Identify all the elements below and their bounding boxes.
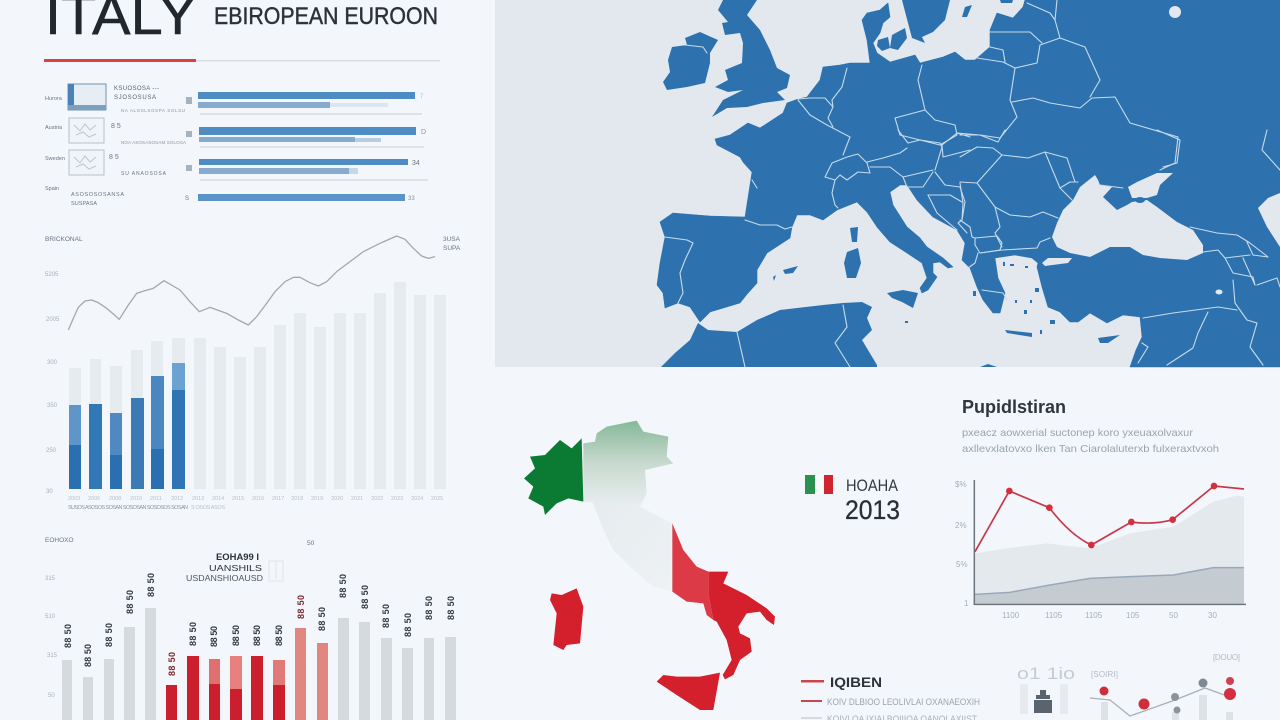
y axis labels: 30 [46, 489, 53, 495]
row 1: icon, labels and bars: 7 [420, 94, 424, 100]
map: Europe [495, 0, 1280, 367]
x axis labels: SUSOS ASOSOS SOSAN SOSOSAN SOSOSOS SOSAN [68, 505, 188, 511]
chart: red and grey bars: 50 [307, 540, 315, 547]
value labels: 88 50 [381, 604, 391, 628]
row 4: labels and bars [45, 186, 415, 207]
light area [975, 496, 1244, 603]
Sweden and Baltic islands [877, 0, 1013, 51]
chart: stacked blue bars with line: BRICKONAL [45, 236, 83, 243]
Sardinia [550, 588, 583, 650]
axis labels: 1100 [1002, 611, 1020, 620]
Sicily [657, 673, 720, 710]
dark area [975, 568, 1244, 603]
y axis labels: 5205 [45, 272, 59, 278]
x axis labels: 2018 [291, 496, 303, 502]
x axis labels: 2006 [88, 496, 100, 502]
legend [801, 674, 980, 720]
value labels: 88 50 [188, 622, 198, 646]
value labels: 88 50 [209, 626, 219, 647]
x axis labels: S OSOS ASOS [191, 505, 225, 511]
value labels: 88 50 [424, 596, 434, 620]
axis labels: 5% [956, 560, 968, 569]
axis labels: 1105 [1085, 611, 1103, 620]
chart heading [186, 552, 283, 583]
x axis labels: 2010 [130, 496, 142, 502]
y axis labels [45, 272, 60, 495]
Black Sea, Azov, Caspian, Marmara and lakes [1042, 6, 1280, 294]
chart heading: UANSHILS [209, 563, 262, 573]
population heading and text [962, 397, 1219, 455]
y axis labels: 250 [46, 448, 57, 454]
value labels: 88 50 [146, 573, 156, 597]
value labels: 88 50 [231, 625, 241, 646]
chart: stacked blue bars with line [45, 236, 461, 511]
chart: stacked blue bars with line: SUPA [443, 245, 461, 252]
row 4: labels and bars: S [185, 196, 189, 202]
row 1: icon, labels and bars: SJOSOSUSA [114, 95, 156, 101]
axes [974, 480, 1246, 604]
legend: IQIBEN [830, 674, 882, 690]
population heading and text: axllevxlatovxo lken Tan Ciarolaluterxb fulxeraxtvxoh [962, 443, 1219, 455]
central region [592, 500, 672, 592]
row 1: icon, labels and bars: NA ALOSLSOSPA SOLSU [121, 108, 185, 113]
value labels: 88 50 [252, 625, 262, 646]
x axis labels: 2008 [109, 496, 121, 502]
x axis labels: 2015 [232, 496, 244, 502]
population heading and text: Pupidlstiran [962, 397, 1066, 417]
country borders [665, 0, 1280, 367]
x axis labels: 2020 [331, 496, 343, 502]
y axis labels: 350 [47, 403, 58, 409]
population heading and text: pxeacz aowxerial suctonep koro yxeuaxolvaxur [962, 427, 1194, 439]
icon and mini line chart [1017, 653, 1240, 720]
axis labels [955, 480, 1217, 620]
flag and year label: 2013 [845, 495, 900, 525]
y axis labels: 315 [45, 576, 56, 582]
row 2: icon, labels and bars: NOA ASOSASOSAM SOLOSA [121, 140, 186, 145]
value labels: 88 50 [296, 595, 306, 619]
flag and year label [805, 475, 900, 525]
value labels: 88 50 [317, 607, 327, 631]
chart heading: USDANSHIOAUSD [186, 574, 263, 583]
Mediterranean islands [773, 227, 1120, 367]
x axis labels: 2025 [431, 496, 443, 502]
icon: device [1034, 690, 1052, 713]
row 2: icon, labels and bars: Austria [45, 125, 63, 131]
chart: red and grey bars [45, 537, 456, 720]
y axis labels: 2005 [46, 317, 60, 323]
flag and year label: HOAHA [846, 476, 899, 495]
north east region [583, 421, 673, 507]
x axis labels [68, 496, 443, 511]
x axis labels: 2014 [212, 496, 224, 502]
value labels: 88 50 [403, 613, 413, 637]
axis labels: $% [955, 480, 967, 489]
value labels: 88 50 [338, 574, 348, 598]
value labels: 88 50 [125, 590, 135, 614]
value labels: 88 50 [274, 625, 284, 646]
icon and mini line chart: [SOIRI] [1091, 670, 1118, 679]
row 3: icon, labels and bars: 34 [412, 160, 420, 167]
x axis labels: 2003 [68, 496, 80, 502]
chart: stacked blue bars with line: 3USA [443, 236, 461, 243]
map: Italy in flag colours [524, 421, 775, 710]
x axis labels: 2017 [272, 496, 284, 502]
row 3: icon, labels and bars [45, 150, 428, 181]
row 1: icon, labels and bars [45, 84, 424, 115]
axis labels: 1 [964, 599, 969, 608]
y axis labels: 300 [47, 360, 58, 366]
x axis labels: 2022 [371, 496, 383, 502]
row 2: icon, labels and bars: D [421, 129, 426, 136]
southern red region [708, 572, 775, 679]
axis labels: 105 [1126, 611, 1140, 620]
red bars [166, 628, 328, 720]
y axis labels: 50 [48, 693, 55, 699]
row 4: labels and bars: 33 [408, 196, 415, 202]
value labels: 88 50 [167, 652, 177, 676]
icon and mini line chart: o1 1io [1017, 664, 1075, 683]
y axis labels: 315 [47, 653, 58, 659]
value labels: 88 50 [83, 644, 93, 667]
row 1: icon, labels and bars: KSUOSOSA --- [114, 86, 159, 92]
row 3: icon, labels and bars: SU ANAOSOSA [121, 171, 167, 177]
x axis labels: 2013 [192, 496, 204, 502]
central red region [672, 523, 713, 620]
continental landmass [657, 0, 1280, 367]
row 1: icon, labels and bars: Hurora [45, 96, 63, 102]
line series [68, 236, 435, 330]
axis labels: 2% [955, 521, 967, 530]
x axis labels: 2011 [150, 496, 162, 502]
row 4: labels and bars: ASOSOSOSANSA [71, 192, 124, 198]
value labels: 88 50 [446, 596, 456, 620]
y axis labels: 510 [45, 614, 56, 620]
x axis labels: 2023 [391, 496, 403, 502]
icon and mini line chart: [DOUO] [1213, 653, 1240, 662]
x axis labels: 2012 [171, 496, 183, 502]
y axis labels [45, 576, 58, 699]
title: Italy [44, 0, 440, 62]
value labels: 88 50 [63, 624, 73, 648]
chart: population area and line [955, 480, 1246, 620]
axis labels: 50 [1169, 611, 1178, 620]
chart: red and grey bars: EOHOXO [45, 537, 74, 544]
row 3: icon, labels and bars: 8 5 [109, 154, 119, 161]
legend: KOIV DLBIOO LEOLIVLAI OXANAEOXIH [827, 697, 980, 708]
x axis labels: 2019 [311, 496, 323, 502]
axis labels: 30 [1208, 611, 1217, 620]
row 4: labels and bars: Spain [45, 186, 59, 192]
Great Britain [712, 0, 790, 117]
grey bars [62, 608, 456, 720]
chart heading: EOHA99 I [216, 552, 259, 562]
background bars [69, 282, 446, 489]
row 2: icon, labels and bars: 8 5 [111, 123, 121, 130]
row 4: labels and bars: SUSPASA [71, 201, 97, 207]
x axis labels: 2024 [411, 496, 423, 502]
Kerch and Aegean islands [973, 197, 1145, 334]
North Africa [661, 302, 877, 367]
x axis labels: 2016 [252, 496, 264, 502]
x axis labels: 2021 [351, 496, 363, 502]
value labels [63, 573, 456, 676]
title: Italy: EBIROPEAN EUROON [214, 3, 438, 30]
value labels: 88 50 [104, 623, 114, 647]
row 2: icon, labels and bars [45, 118, 426, 148]
panel: horizontal bar rows [45, 84, 428, 207]
red series [975, 486, 1244, 552]
axis labels: 1105 [1045, 611, 1063, 620]
row 3: icon, labels and bars: Sweden [45, 156, 65, 162]
value labels: 88 50 [360, 585, 370, 609]
blue stacked bars [69, 363, 185, 489]
Ireland [663, 32, 718, 90]
north west region [524, 438, 583, 515]
